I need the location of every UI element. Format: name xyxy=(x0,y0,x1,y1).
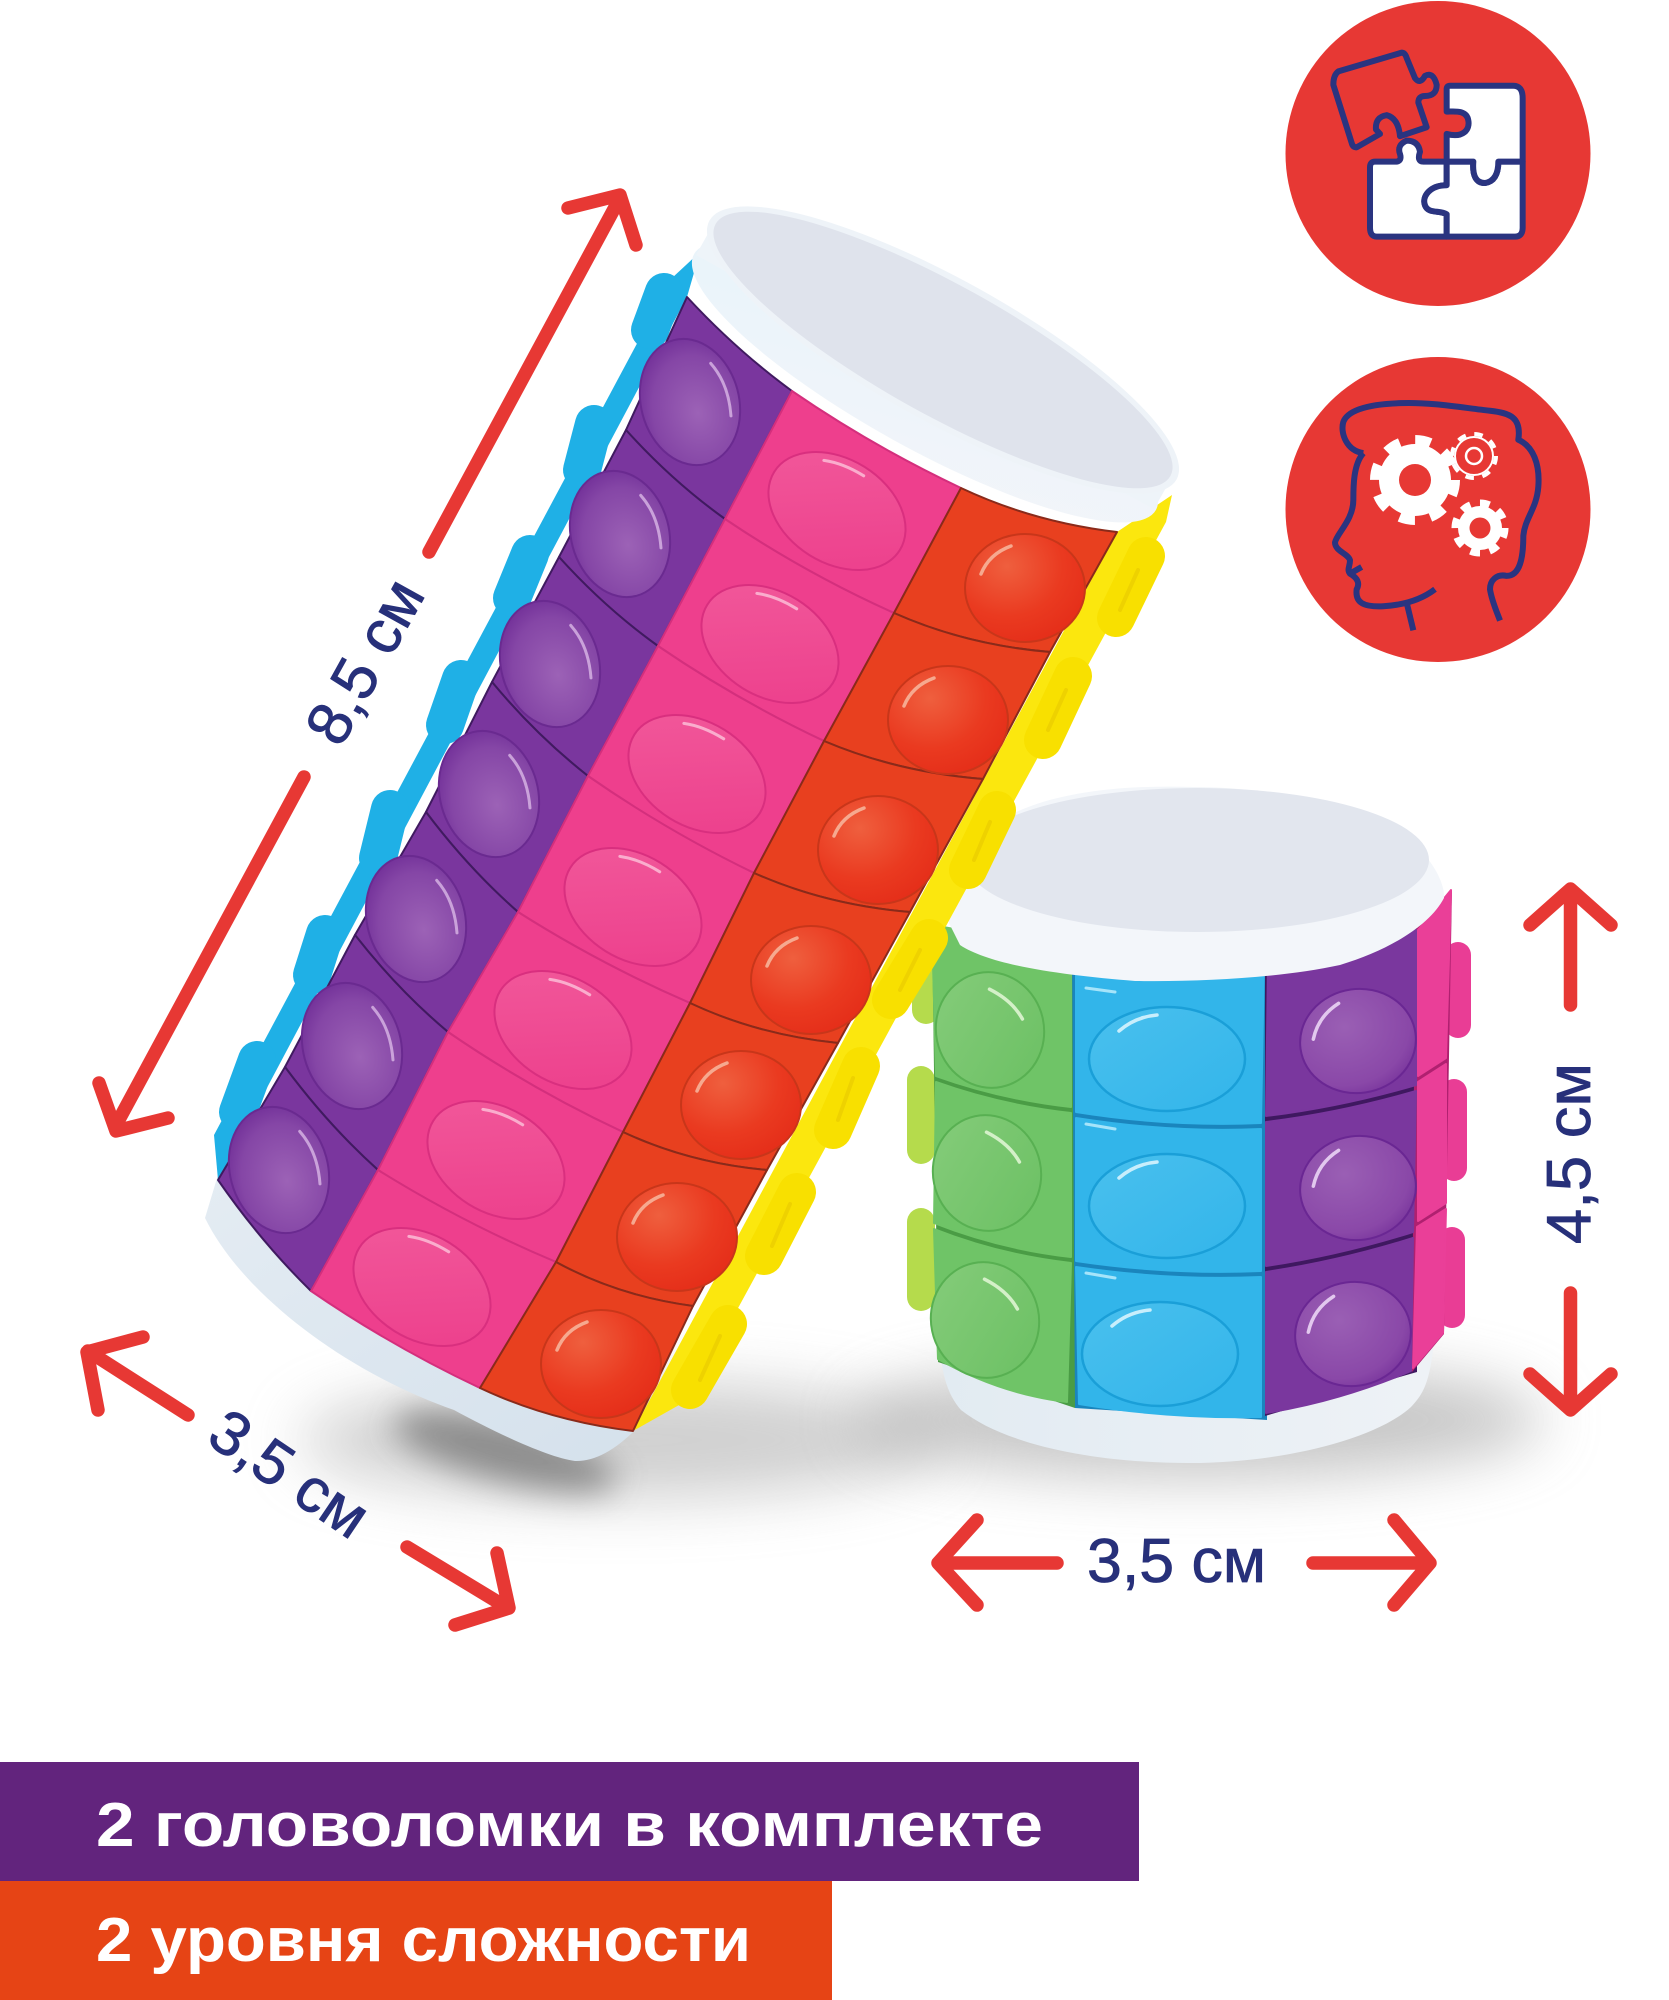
label: short tower 3,5 см: 3,5 см xyxy=(1087,1527,1266,1596)
column: pink tiles xyxy=(311,391,961,1388)
arrow: tall tower height, lower xyxy=(99,777,304,1131)
base xyxy=(938,1340,1434,1463)
white cap xyxy=(949,787,1444,981)
label: 4,5 см: 4,5 см xyxy=(1535,1063,1604,1244)
domes: blue xyxy=(1082,1007,1245,1406)
left side bumps: lime xyxy=(921,945,926,1297)
gaps behind tiles xyxy=(932,890,1452,1420)
arrow: short tower width, left xyxy=(938,1520,1057,1605)
icon: puzzle pieces in red circle xyxy=(1286,1,1590,306)
column: yellow strip and bumps xyxy=(633,495,1172,1431)
shadow: tall tower, wide and soft xyxy=(300,1382,940,1498)
arrow: short tower height, down xyxy=(1530,1293,1611,1410)
domes: green xyxy=(920,962,1055,1388)
arrow: short tower height, up xyxy=(1530,889,1611,1005)
domes: purple xyxy=(215,327,754,1245)
domes: red xyxy=(541,534,1085,1418)
base xyxy=(205,1175,640,1461)
short tower puzzle xyxy=(920,787,1458,1463)
shadow: short tower xyxy=(855,1362,1545,1478)
tile highlights: blue xyxy=(1086,988,1115,1278)
domes: pink xyxy=(332,428,927,1370)
column: blue xyxy=(1076,960,1264,1417)
column: pink xyxy=(1413,890,1451,1368)
banner: purple xyxy=(0,1762,1139,1881)
arrow: tall tower height, upper xyxy=(429,195,636,552)
icon: head with gears in red circle xyxy=(1286,357,1590,662)
column: green xyxy=(932,925,1071,1402)
arrow: short tower width, right xyxy=(1313,1520,1430,1605)
column: red tiles xyxy=(480,488,1117,1431)
column: blue backing and bumps xyxy=(214,252,700,1180)
small solid gear xyxy=(1455,503,1505,553)
banner text: 2 уровня сложности xyxy=(96,1906,751,1975)
puzzle outlines xyxy=(1333,53,1523,237)
label: 8,5 см: 8,5 см xyxy=(292,568,438,756)
large gear xyxy=(1375,440,1455,520)
banner: orange xyxy=(0,1881,832,2000)
domes: purple xyxy=(1288,981,1423,1394)
right side bumps: pink xyxy=(1452,955,1458,1315)
banner text: 2 головоломки в комплекте xyxy=(96,1791,1043,1860)
arrow: tall tower width, left xyxy=(87,1337,188,1415)
column: purple tiles xyxy=(218,297,792,1291)
arrow: tall tower width, right xyxy=(407,1547,509,1625)
label: tall tower 3,5 см: 3,5 см xyxy=(196,1396,382,1552)
white cap xyxy=(662,158,1211,568)
shadow: tall tower, contact xyxy=(386,1393,624,1511)
tall tower puzzle xyxy=(205,158,1211,1461)
head outline xyxy=(1335,403,1539,630)
column: purple xyxy=(1266,930,1416,1413)
outline gear xyxy=(1452,434,1496,478)
